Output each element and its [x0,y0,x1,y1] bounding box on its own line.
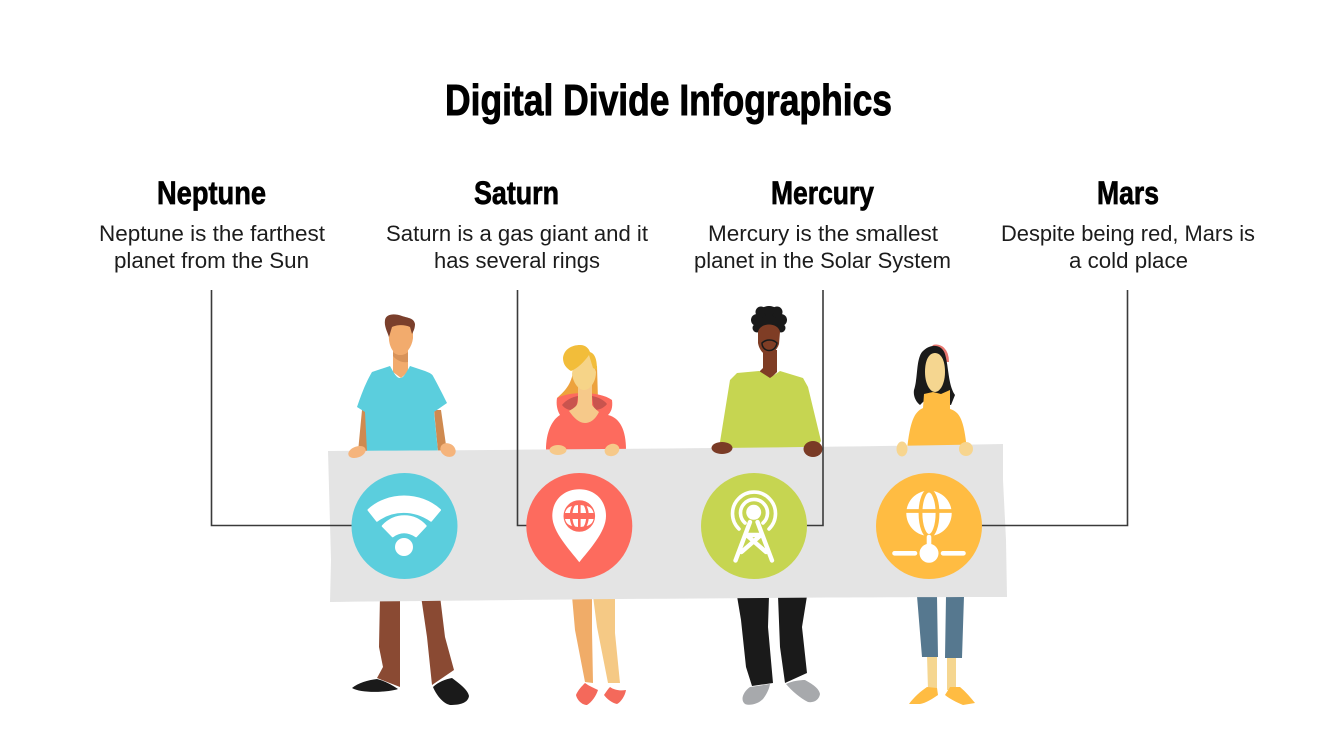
text block: Mercury [694,175,951,273]
text block: Neptune [99,175,325,273]
text block: Mars [1001,175,1255,273]
heading: Neptune: Neptune [157,175,266,211]
figure: man in green shirt [720,306,821,705]
hands holding the banner [347,440,973,460]
icon: radio tower [701,473,807,579]
heading: Mercury: Mercury [771,175,874,211]
description: Saturn: has several rings [434,248,600,273]
description: Mercury: planet in the Solar System [694,248,951,273]
description: Saturn: Saturn is a gas giant and it [386,221,648,246]
text block: Saturn [386,175,648,273]
description: Mercury [694,221,951,273]
figure: woman in yellow sweater [907,346,975,705]
icon: wifi [352,473,458,579]
figure: woman in red hoodie [546,345,626,705]
description: Neptune: Neptune is the farthest [99,221,325,246]
connector: Mercury [806,290,823,526]
description: Mars: a cold place [1069,248,1188,273]
heading: Mars: Mars [1097,175,1159,211]
description: Mercury: Mercury is the smallest [708,221,938,246]
description: Neptune: planet from the Sun [114,248,309,273]
heading: Saturn: Saturn [474,175,559,211]
icon: location pin with globe [526,473,632,579]
figure: man in blue shirt [352,314,469,705]
description: Mars: Despite being red, Mars is [1001,221,1255,246]
connector: Mars [981,290,1128,526]
description: Saturn [386,221,648,273]
icon: network globe [876,473,982,579]
title: Digital Divide Infographics [445,76,892,125]
connector: Saturn [518,290,528,526]
paper banner [328,444,1007,602]
connector: Neptune [212,290,352,526]
description: Mars [1001,221,1255,273]
description: Neptune [99,221,325,273]
